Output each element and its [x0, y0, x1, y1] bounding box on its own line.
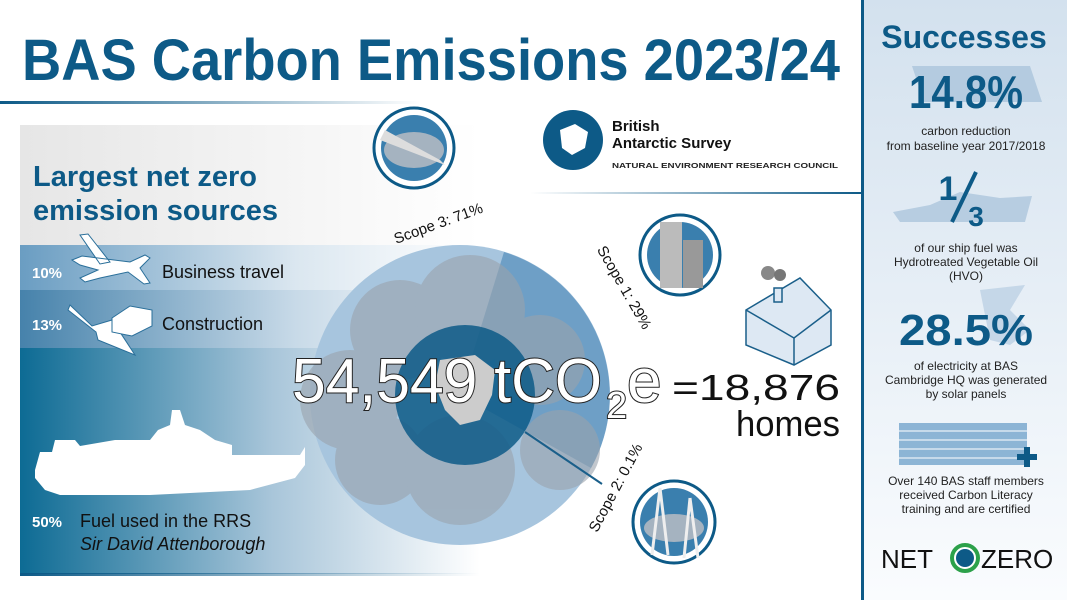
stat: one third: (HVO)	[949, 269, 983, 283]
title: BAS Carbon Emissions 2023/24	[22, 28, 840, 93]
stat: staff icons: received Carbon Literacy	[899, 488, 1033, 502]
total emissions: 2	[606, 385, 627, 427]
logo: british antarctic survey: British	[612, 118, 660, 135]
stat: 14.8%	[887, 66, 1046, 153]
logo: british antarctic survey	[530, 110, 862, 194]
icon: pylons in cloud	[633, 481, 715, 563]
stat: one third	[893, 170, 1038, 283]
icon: trowel and brick	[68, 305, 135, 355]
clouds	[300, 255, 600, 525]
stat: 28.5%: Cambridge HQ was generated	[885, 373, 1047, 387]
net zero logo: NET	[881, 544, 933, 574]
stat: 14.8%: 14.8%	[909, 66, 1023, 118]
net zero logo	[881, 544, 1053, 574]
inner circle	[395, 325, 535, 465]
homes equivalence: =18,876	[672, 367, 840, 408]
row: construction: 13%	[32, 317, 62, 334]
row: business travel: 10%	[32, 265, 62, 282]
total emissions: 54,549 tCO	[292, 347, 602, 416]
icon: buildings in cloud	[640, 215, 720, 295]
row: business travel	[32, 234, 284, 284]
homes equivalence: homes	[736, 403, 840, 444]
net zero logo: ZERO	[981, 544, 1053, 574]
chart: scope donut	[300, 245, 610, 545]
icon: plane in cloud	[374, 108, 454, 188]
stat: one third: Hydrotreated Vegetable Oil	[894, 255, 1038, 269]
row: fuel	[32, 511, 265, 554]
icon: plane	[72, 234, 150, 284]
row: fuel: Sir David Attenborough	[80, 534, 265, 554]
stat: 28.5%: 28.5%	[899, 306, 1033, 355]
panel: successes	[861, 0, 1067, 600]
segment: scope 1	[460, 252, 610, 468]
stat: staff icons	[888, 423, 1044, 516]
stat: 14.8%: from baseline year 2017/2018	[887, 139, 1046, 153]
logo: british antarctic survey: Antarctic Survey	[612, 135, 732, 152]
stat: 28.5%: by solar panels	[926, 387, 1006, 401]
stat: one third: 3	[968, 201, 984, 232]
logo: british antarctic survey: NATURAL ENVIRONMENT RESEARCH COUNCIL	[612, 161, 839, 170]
row: fuel: Fuel used in the RRS	[80, 511, 251, 531]
label: scope 3: Scope 3: 71%	[392, 200, 485, 248]
stat: one third: 1	[939, 170, 957, 208]
panel: largest sources	[20, 125, 480, 576]
panel: largest sources: emission sources	[33, 195, 278, 227]
icon: house	[746, 266, 831, 365]
scope 2 pointer	[525, 432, 602, 484]
stat: staff icons: training and are certified	[902, 502, 1030, 516]
homes equivalence	[672, 367, 840, 444]
row: construction: Construction	[162, 314, 263, 334]
label: scope 1: Scope 1: 29%	[593, 243, 655, 332]
heading: largest net zero emission sources: Largest net zero	[33, 161, 257, 193]
stat: staff icons: Over 140 BAS staff members	[888, 474, 1044, 488]
successes heading: Successes	[881, 19, 1047, 55]
row: construction	[32, 305, 263, 355]
icon: ship	[35, 410, 305, 495]
stat: 28.5%: of electricity at BAS	[914, 359, 1018, 373]
row: fuel: 50%	[32, 514, 62, 531]
stat: 14.8%: carbon reduction	[921, 124, 1011, 138]
stat: one third: of our ship fuel was	[914, 241, 1018, 255]
total emissions: e	[627, 347, 661, 416]
icon: antarctica	[435, 355, 495, 425]
label: scope 2: Scope 2: 0.1%	[586, 441, 646, 535]
stat: 28.5%	[885, 285, 1047, 401]
row: business travel: Business travel	[162, 262, 284, 282]
